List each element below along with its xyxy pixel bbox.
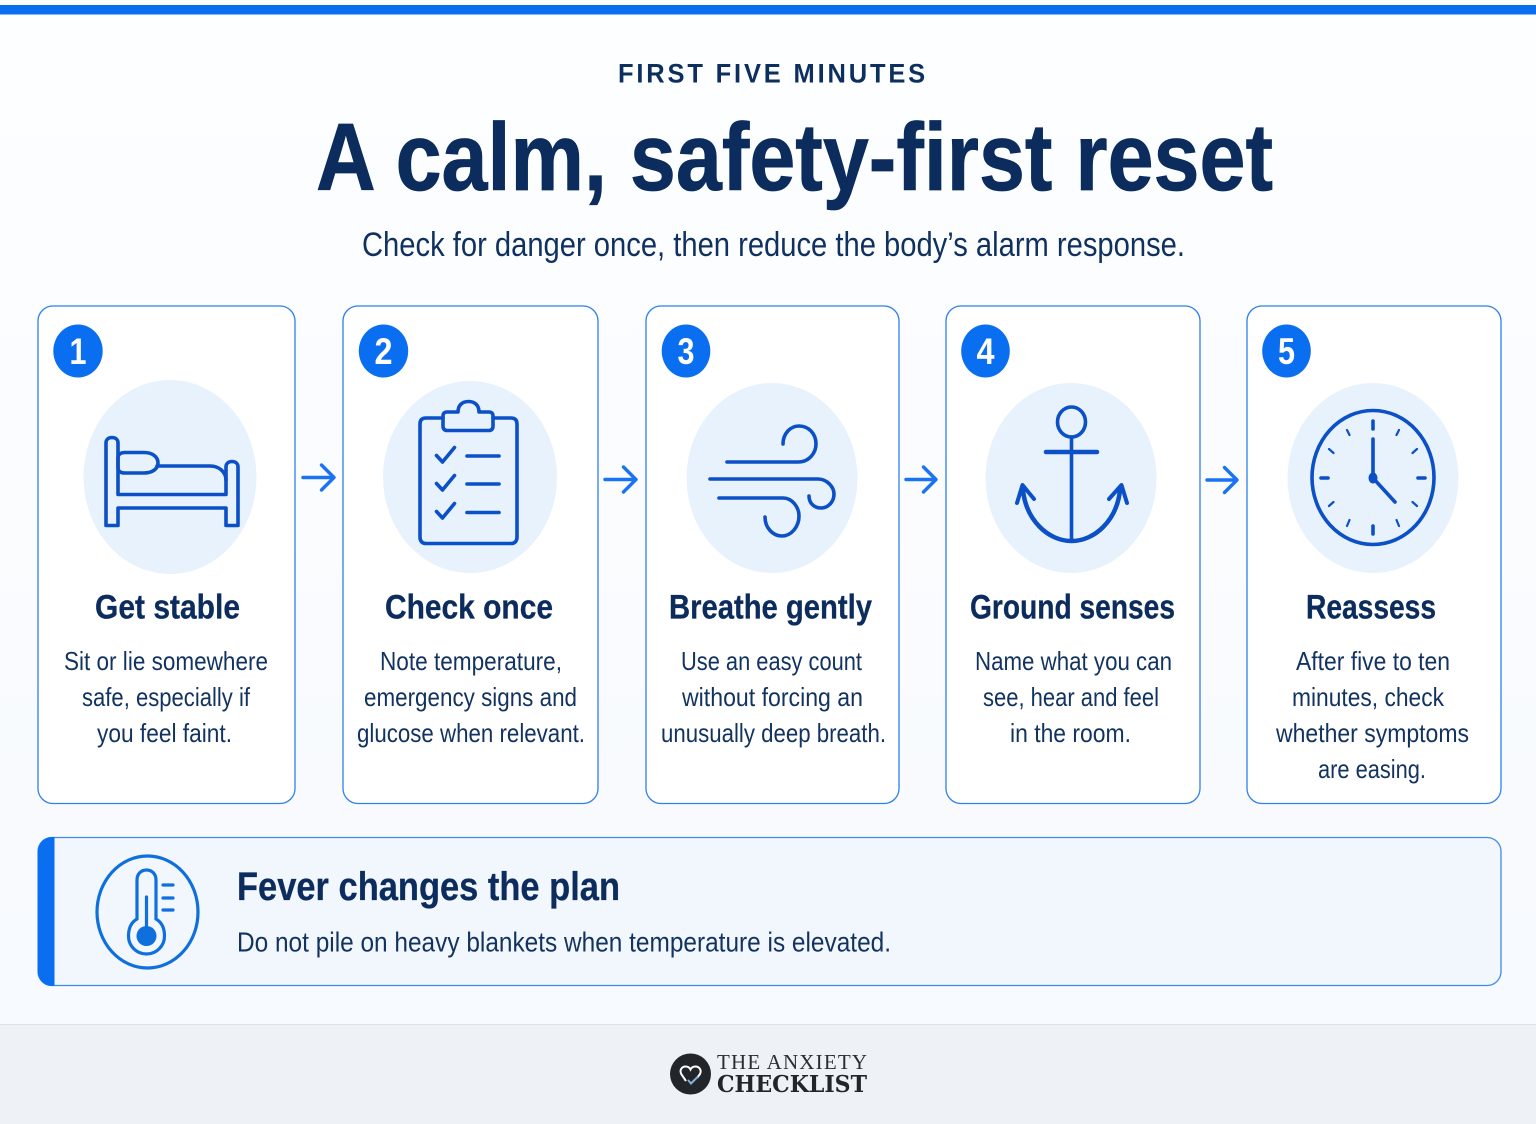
icon: thermometer [97,856,198,968]
icon: heart check badge [670,1054,711,1094]
step 3 body text: without forcing an [681,682,863,712]
step 1 body text [64,646,268,748]
arrow: step 1 to 2 [303,465,334,490]
step 5 body text: minutes, check [1292,682,1445,712]
step 4 number badge [961,324,1010,378]
step 4 body text [975,646,1172,748]
subtitle: Check for danger once, then reduce the body’s alarm response. [362,226,1185,264]
footer logo [670,1050,867,1098]
step 2 body text [357,646,585,748]
step 1 body text: Sit or lie somewhere [64,646,268,676]
step 3 body text: unusually deep breath. [661,718,886,748]
step 1 body text: safe, especially if [82,682,251,712]
step 3 number badge [662,324,710,378]
callout heading: Fever changes the plan [237,865,620,909]
step 5 body text: are easing. [1318,754,1426,784]
step 5 body text: After five to ten [1296,646,1450,676]
step 3 body text [661,646,886,748]
step 3 heading: Breathe gently [669,588,872,626]
step 2 body text: Note temperature, [380,646,562,676]
icon: bed [84,380,256,574]
eyebrow heading: FIRST FIVE MINUTES [618,58,928,88]
step 5 number badge: 5 [1278,331,1295,372]
arrow: step 4 to 5 [1207,468,1237,492]
step 2 number badge: 2 [374,331,392,372]
step 5 body text [1275,646,1469,784]
icon: wind [686,383,858,573]
step 4 body text: in the room. [1010,718,1131,748]
top accent bar [0,5,1536,14]
panel: fever callout [38,837,1501,986]
panel: step 5 reassess [1247,306,1501,804]
arrow: step 3 to 4 [906,467,936,492]
title: A calm, safety-first reset [316,104,1273,211]
brand name line 1: THE ANXIETY [717,1050,867,1074]
step 2 body text: glucose when relevant. [357,718,585,748]
step 1 body text: you feel faint. [97,718,232,748]
panel: step 1 get stable [38,306,295,804]
icon: anchor [986,383,1156,573]
panel: step 4 ground senses [946,306,1200,804]
step 2 body text: emergency signs and [364,682,577,712]
step 4 body text: Name what you can [975,646,1172,676]
step 5 body text: whether symptoms [1275,718,1469,748]
step 1 number badge [53,324,103,378]
panel: step 2 check once [343,306,598,804]
step 4 body text: see, hear and feel [983,682,1159,712]
step 4 heading: Ground senses [970,588,1175,626]
arrow: step 2 to 3 [605,467,636,492]
step 5 number badge [1262,324,1311,378]
step 5 heading: Reassess [1306,588,1436,626]
step 1 number badge: 1 [70,331,86,372]
callout text: Do not pile on heavy blankets when temperature is elevated. [237,926,891,958]
panel: step 3 breathe gently [646,306,899,804]
step 4 number badge: 4 [976,331,995,372]
step 3 number badge: 3 [678,331,694,372]
step 3 body text: Use an easy count [681,646,863,676]
step 2 number badge [359,324,408,378]
step 2 heading: Check once [385,588,553,626]
step 1 heading: Get stable [95,588,240,626]
icon: clock [1288,383,1458,573]
brand name line 2: CHECKLIST [717,1071,867,1098]
icon: clipboard checklist [383,381,557,573]
footer band [0,1024,1536,1124]
